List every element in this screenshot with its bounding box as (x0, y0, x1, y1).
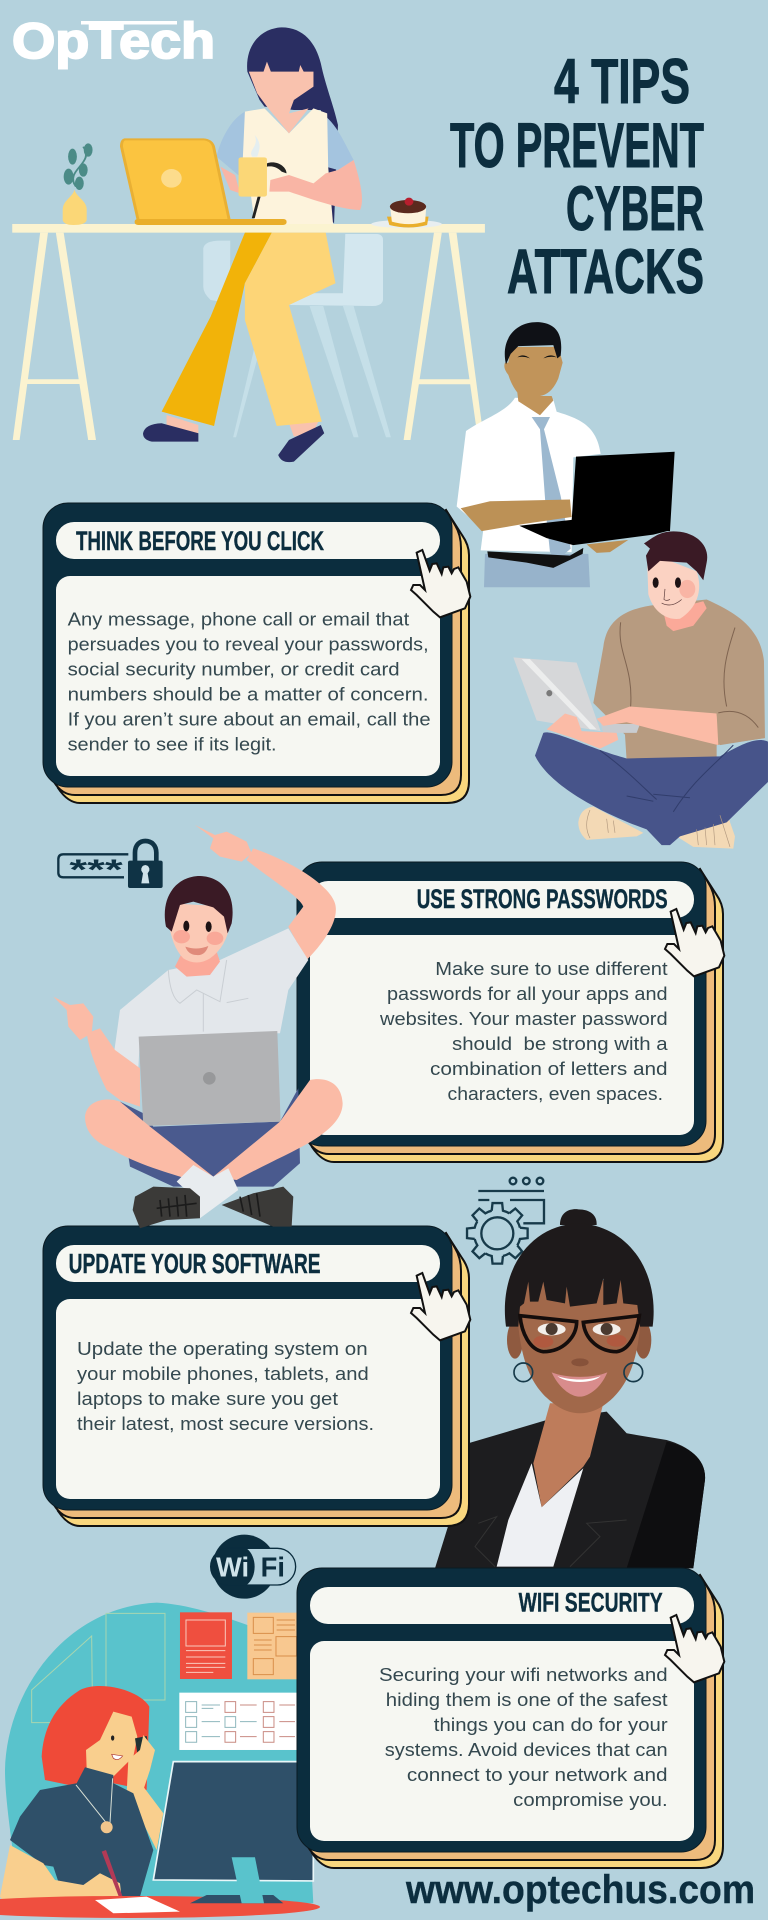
card 4 body text: Securing your wifi networks and (379, 1664, 668, 1685)
card 1 body text: If you aren’t sure about an email, call the (68, 709, 431, 730)
card 2 body text (379, 958, 668, 1104)
card 3 heading: UPDATE YOUR SOFTWARE (69, 1248, 321, 1279)
card 4 heading: WIFI SECURITY (519, 1588, 663, 1618)
icon: hand cursor (411, 1273, 470, 1340)
card 3: update your software (43, 1226, 470, 1526)
card 1 body text: numbers should be a matter of concern. (68, 684, 429, 705)
card 4: wifi security (297, 1568, 724, 1868)
icon: gear and browser window (467, 1178, 544, 1264)
card 1 body text: social security number, or credit card (68, 659, 400, 680)
card 1 body text: persuades you to reveal your passwords, (68, 634, 429, 655)
illustration: smiling woman in glasses and black blazer (435, 1209, 705, 1568)
icon: WiFi badge (211, 1535, 296, 1599)
card 2 body text: characters, even spaces. (448, 1083, 663, 1104)
card 3 frame (43, 1226, 469, 1526)
card 3 body text: laptops to make sure you get (77, 1388, 338, 1409)
card 4 body text (379, 1664, 668, 1810)
card 4 body text: hiding them is one of the safest (386, 1689, 668, 1710)
card 1 body text: sender to see if its legit. (68, 734, 277, 755)
card 3 body text (77, 1338, 374, 1434)
card 2 body text: passwords for all your apps and (387, 983, 668, 1004)
card 2 body text: websites. Your master password (379, 1008, 668, 1029)
icon: password field and padlock (58, 841, 163, 888)
illustration: man in sweater with tablet (513, 531, 768, 849)
icon: WiFi badge: Wi (216, 1551, 249, 1582)
card 2 frame (297, 862, 723, 1162)
illustration: man holding black laptop (457, 322, 675, 587)
card 2 heading: USE STRONG PASSWORDS (417, 884, 668, 914)
icon: boy's shoes resting on card 3 (133, 1187, 293, 1228)
card 3 body text: your mobile phones, tablets, and (77, 1363, 369, 1384)
card 3 body text: Update the operating system on (77, 1338, 368, 1359)
card 4 body text: things you can do for your (434, 1714, 668, 1735)
card 4 body text: systems. Avoid devices that can (385, 1739, 668, 1760)
illustration: woman working at desk (12, 27, 485, 462)
card 2 body text: Make sure to use different (435, 958, 668, 979)
title (450, 47, 704, 307)
card 4 body text: connect to your network and (407, 1764, 668, 1785)
icon: hand cursor (665, 909, 724, 976)
illustration: red-haired woman on the phone at a desk (0, 1603, 320, 1918)
card 1: think before you click (43, 503, 470, 803)
card 2 body text: should be strong with a (452, 1033, 668, 1054)
illustration: boy sitting cross-legged with laptop, pointing (53, 825, 343, 1218)
card 1 body text: Any message, phone call or email that (68, 609, 409, 630)
card 3 body text: their latest, most secure versions. (77, 1413, 374, 1434)
title: 4 TIPS (554, 47, 690, 117)
card 1 body text (68, 609, 431, 755)
card 4 body text: compromise you. (513, 1789, 668, 1810)
icon: hand cursor (665, 1615, 724, 1682)
icon: password field and padlock: *** (69, 854, 124, 886)
icon: WiFi badge: Fi (261, 1551, 285, 1582)
card 1 heading: THINK BEFORE YOU CLICK (76, 526, 324, 556)
card 4 frame (297, 1568, 723, 1868)
icon: hand cursor (411, 550, 470, 617)
card 2 body text: combination of letters and (430, 1058, 668, 1079)
card 2: use strong passwords (297, 862, 724, 1162)
card 1 frame (43, 503, 469, 803)
logo: OpTech: OpTech (12, 13, 215, 69)
